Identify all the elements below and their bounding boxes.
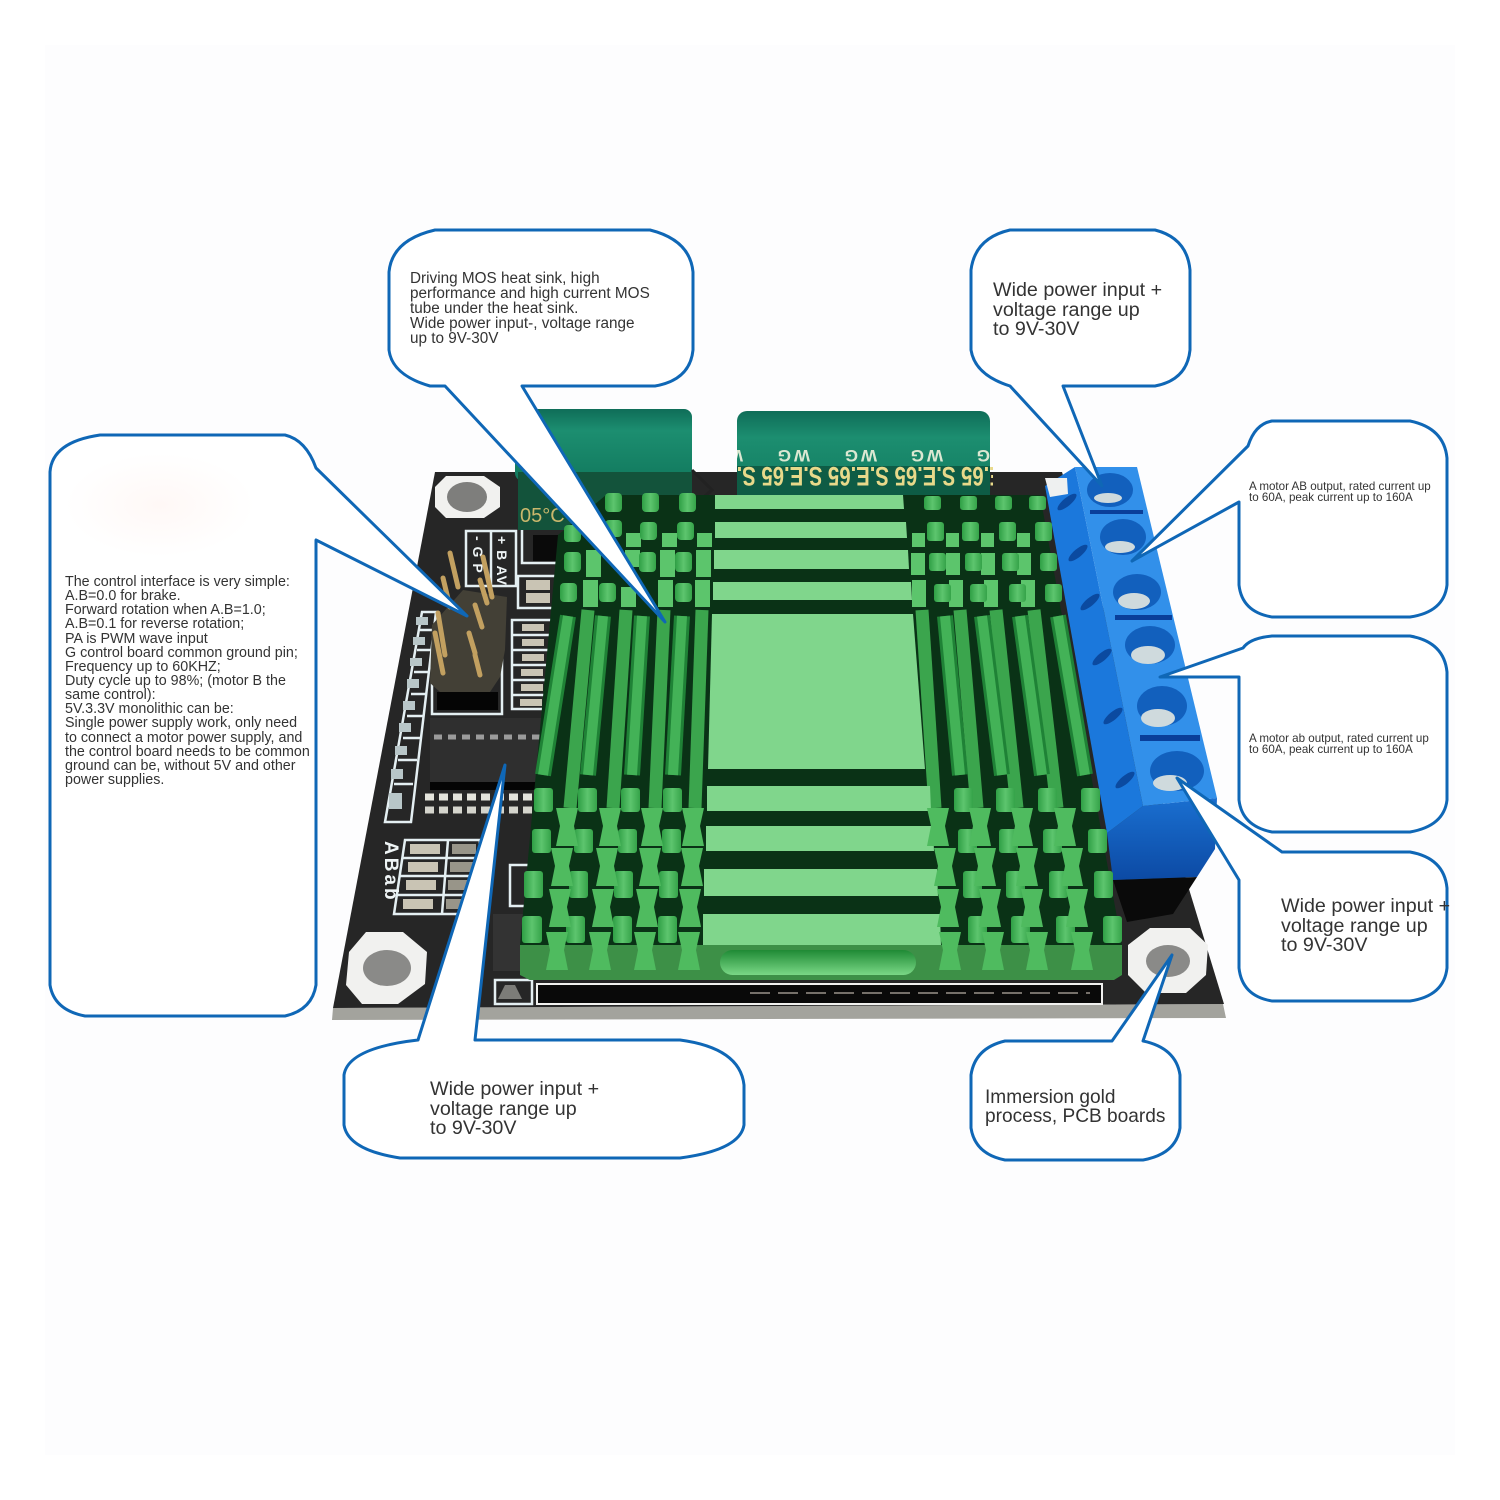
heat sink text: performance and high current MOS [410, 285, 650, 302]
block front face [1107, 798, 1217, 880]
motor AB text: to 60A, peak current up to 160A [1249, 491, 1413, 504]
callout: heat sink [389, 230, 693, 622]
long fin ridges [543, 616, 1085, 775]
base front with slot [520, 945, 1122, 980]
immersion gold text: process, PCB boards [985, 1106, 1165, 1127]
immersion gold text: Immersion gold [985, 1087, 1116, 1108]
SMD component groups [512, 576, 558, 709]
right capacitor: WG [708, 446, 743, 465]
motor ab text: to 60A, peak current up to 160A [1249, 743, 1413, 756]
right capacitor: S.E.65 S.E.65 S.E.65 S.E.65 S.E.65 [695, 461, 1022, 491]
heat sink text: up to 9V-30V [410, 330, 499, 347]
right capacitor [737, 411, 993, 495]
control interface text: A.B=0.0 for brake. [65, 588, 181, 604]
block top face [1075, 467, 1217, 806]
fin stubs: right bottom [954, 788, 1122, 943]
rear fin ridges [570, 610, 1057, 808]
driver IC [425, 718, 542, 810]
right capacitor: WG [974, 446, 1009, 465]
LED indicator block: ABab [380, 841, 401, 903]
control interface text: The control interface is very simple: [65, 574, 290, 590]
motor AB text: A motor AB output, rated current up [1249, 480, 1431, 493]
heat sink text: Driving MOS heat sink, high [410, 270, 600, 287]
heat sink text: Wide power input-, voltage range [410, 315, 634, 332]
fin stubs: right top [924, 496, 1062, 602]
control interface text: Single power supply work, only need [65, 715, 297, 731]
control interface text: same control): [65, 687, 156, 703]
callout: motor AB output [1132, 421, 1447, 617]
heat sink [520, 493, 1122, 980]
control interface text: PA is PWM wave input [65, 631, 208, 647]
LED indicator block [380, 840, 480, 914]
terminal block [1045, 467, 1217, 880]
motor ab text: A motor ab output, rated current up [1249, 732, 1429, 745]
right capacitor: WG [908, 446, 943, 465]
callout: control interface [50, 435, 467, 1016]
signal label strip [385, 612, 436, 822]
fin stubs: left bottom [522, 788, 682, 943]
pink smudge [65, 453, 255, 557]
control interface text: A.B=0.1 for reverse rotation; [65, 616, 244, 632]
control interface text: to connect a motor power supply, and [65, 730, 302, 746]
control interface text: power supplies. [65, 772, 164, 788]
control interface text: 5V.3.3V monolithic can be: [65, 701, 234, 717]
silkscreen: power label box: - G P [470, 536, 486, 574]
rear fin upper segments [583, 533, 1035, 607]
pin header [430, 553, 507, 714]
silkscreen: power label box: + B AV [494, 536, 510, 586]
mounting hole: top left [435, 476, 500, 518]
control interface text: the control board needs to be common [65, 744, 310, 760]
power input bottom text: to 9V-30V [430, 1117, 517, 1139]
right capacitor: WG [842, 446, 877, 465]
side slots [1055, 491, 1137, 791]
power input text: voltage range up [993, 299, 1140, 321]
callout: motor ab output [1160, 636, 1447, 832]
power input right text: Wide power input + [1281, 895, 1450, 917]
fin stubs: left top [560, 493, 696, 602]
left capacitor: 05°C [520, 505, 565, 527]
power input bottom text: Wide power input + [430, 1078, 599, 1100]
hourglass fins [546, 808, 1093, 970]
mounting hole: bottom right [1128, 928, 1208, 993]
callout: power input bottom [344, 765, 744, 1158]
left capacitor: 10 10 [618, 494, 696, 515]
control interface text: Forward rotation when A.B=1.0; [65, 602, 266, 618]
PCB board [332, 472, 1226, 1020]
left capacitor [515, 409, 712, 530]
power input text: to 9V-30V [993, 318, 1080, 340]
power input bottom text: voltage range up [430, 1098, 577, 1120]
control interface text: Duty cycle up to 98%; (motor B the [65, 673, 286, 689]
heat sink body [520, 495, 1122, 980]
power input right text: voltage range up [1281, 915, 1428, 937]
callout: immersion gold [971, 955, 1180, 1160]
divider bars [1090, 510, 1200, 741]
top plates and centre block [703, 495, 941, 945]
power input right text: to 9V-30V [1281, 934, 1368, 956]
control interface text: G control board common ground pin; [65, 645, 298, 661]
control interface text: Frequency up to 60KHZ; [65, 659, 221, 675]
right capacitor: WG [775, 446, 810, 465]
lower PCB details [493, 865, 1102, 1004]
block side face [1045, 467, 1143, 833]
capacitors [515, 409, 1022, 530]
callout: power input right [1177, 778, 1456, 1001]
silkscreen: power label box [466, 522, 563, 586]
power input text: Wide power input + [993, 279, 1162, 301]
mounting hole: bottom left [346, 932, 427, 1004]
screw holes [1087, 473, 1204, 791]
heat sink text: tube under the heat sink. [410, 300, 578, 317]
control interface text: ground can be, without 5V and other [65, 758, 296, 774]
callout: power input top [971, 230, 1190, 486]
